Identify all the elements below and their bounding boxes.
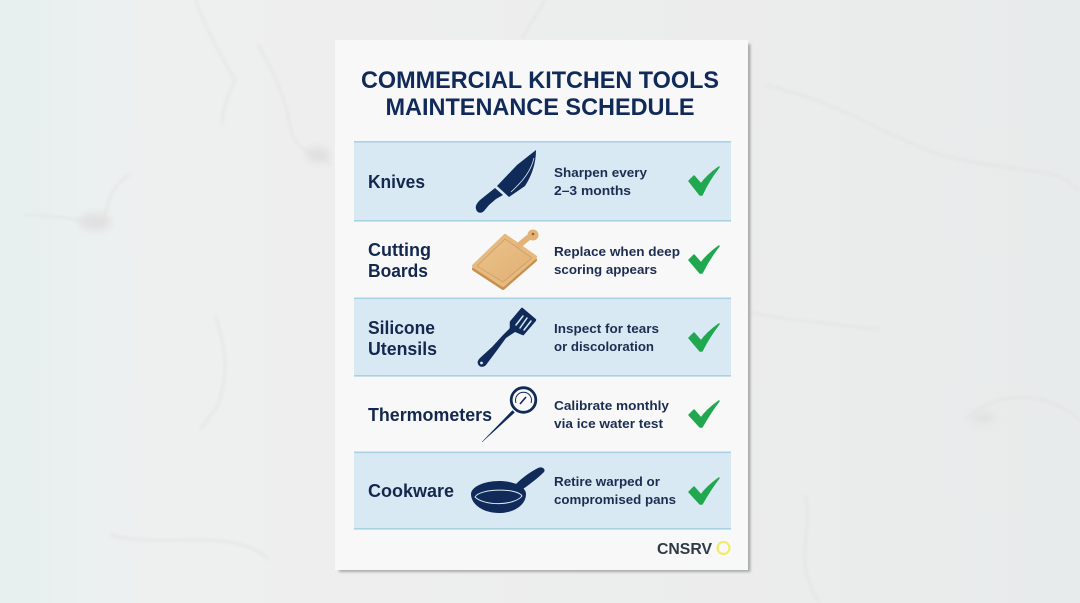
label: cutting boards: Cutting (368, 239, 431, 260)
icon: check (689, 324, 719, 351)
icon: check (689, 167, 719, 195)
title (361, 67, 719, 121)
icon: frying pan (471, 467, 545, 513)
text: knives task (554, 165, 648, 198)
label: thermometers: Thermometers (368, 404, 492, 425)
text: thermometers task: Calibrate monthly (554, 398, 670, 413)
row: cookware (354, 452, 731, 530)
icon: spatula (478, 309, 535, 367)
text: boards task: Replace when deep (554, 244, 680, 259)
row: knives (354, 141, 731, 222)
label: silicone utensils: Silicone (368, 317, 435, 338)
row: silicone utensils (354, 298, 731, 377)
label: silicone utensils: Utensils (368, 338, 437, 359)
text: thermometers task (554, 398, 670, 431)
text: utensils task: Inspect for tears (554, 321, 659, 336)
text: cookware task (554, 474, 676, 507)
icon: chef knife (476, 150, 536, 213)
label: cookware: Cookware (368, 480, 454, 501)
text: utensils task: or discoloration (554, 339, 654, 354)
logo: CNSRV: CNSRV (657, 541, 713, 558)
text: thermometers task: via ice water test (554, 416, 664, 431)
text: boards task (554, 244, 680, 277)
text: utensils task (554, 321, 659, 354)
row: thermometers (368, 388, 719, 442)
label: cutting boards: Boards (368, 260, 428, 281)
text: cookware task: compromised pans (554, 492, 676, 507)
icon: check (689, 401, 719, 427)
title: COMMERCIAL KITCHEN TOOLS (361, 67, 719, 94)
text: knives task: 2–3 months (554, 183, 631, 198)
icon: thermometer (482, 388, 536, 442)
paper shadow (339, 44, 750, 572)
label: knives: Knives (368, 171, 425, 192)
icon: check (689, 478, 719, 504)
title: MAINTENANCE SCHEDULE (386, 94, 694, 121)
paper sheet (335, 40, 748, 570)
icon: cutting board (474, 230, 538, 288)
label: cutting boards (368, 239, 431, 281)
icon: check (689, 246, 719, 273)
label: silicone utensils (368, 317, 437, 359)
text: boards task: scoring appears (554, 262, 657, 277)
text: cookware task: Retire warped or (554, 474, 660, 489)
text: knives task: Sharpen every (554, 165, 648, 180)
row: cutting boards (368, 230, 719, 288)
